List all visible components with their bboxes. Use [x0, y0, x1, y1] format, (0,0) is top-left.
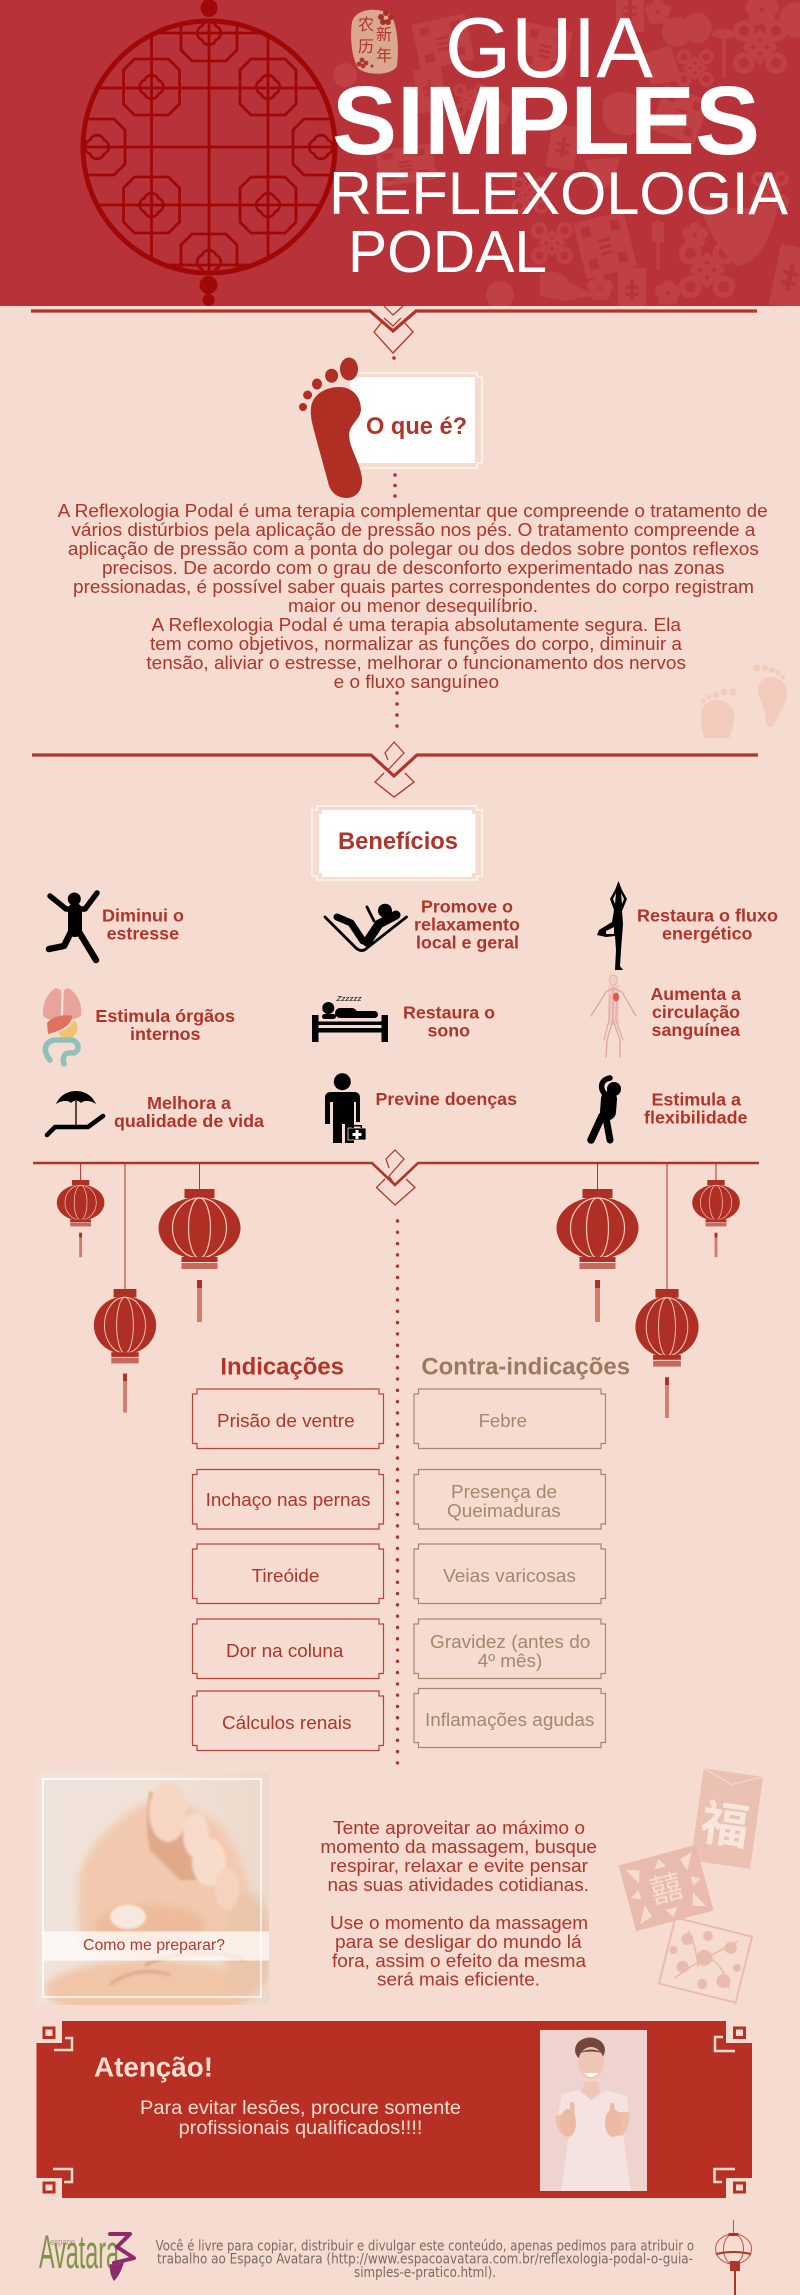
benefit: qualidade de vida: Melhora a — [147, 1093, 231, 1113]
corner ornaments — [44, 2028, 744, 2192]
heading: Indicações: Indicações — [220, 1354, 344, 1381]
list: contraindications — [414, 1389, 606, 1748]
benefit: órgãos internos: internos — [130, 1024, 201, 1044]
list: indications: Cálculos renais — [222, 1712, 352, 1733]
benefit: previne doenças: Previne doenças — [376, 1089, 517, 1109]
dots — [393, 473, 397, 498]
text block: how to prepare: para se desligar do mundo lá — [335, 1931, 582, 1952]
benefit: diminui o estresse: Diminui o — [102, 906, 184, 926]
logo: Espaço Avatara: Avatara — [39, 2225, 119, 2278]
icon: lunar new year stamp — [351, 10, 398, 74]
text block: how to prepare: fora, assim o efeito da mesma — [332, 1950, 587, 1971]
benefit: diminui o estresse — [49, 892, 184, 960]
list: contraindications: Febre — [479, 1410, 527, 1431]
list: indications: Dor na coluna — [226, 1640, 344, 1661]
logo: Espaço Avatara — [39, 2225, 134, 2281]
icon: internal organs — [43, 988, 81, 1064]
icon: red envelope and paper cuts: 囍 — [646, 1867, 686, 1910]
text block: what it is: pressionadas, é possível saber quais partes correspondentes do corpo registram — [73, 576, 754, 597]
panel: Benefícios heading — [312, 806, 482, 880]
icon: ornamental round window lattice — [69, 0, 350, 306]
title: SIMPLES — [332, 66, 760, 175]
list: contraindications: 4º mês) — [478, 1650, 542, 1671]
text block: how to prepare: nas suas atividades cotidianas. — [328, 1874, 589, 1895]
caption strip — [43, 1931, 269, 1961]
benefit: circulação: Aumenta a — [650, 984, 741, 1004]
list: indications: Inchaço nas pernas — [206, 1489, 370, 1510]
benefit: relaxamento: Promove o — [421, 897, 513, 917]
text block: how to prepare: Tente aproveitar ao máximo o — [333, 1817, 585, 1838]
icon: faded footprints — [701, 664, 787, 745]
footer text: trabalho ao Espaço Avatara (http://www.espacoavatara.com.br/reflexologia-podal-o-guia- — [157, 2252, 693, 2268]
benefit: circulação: circulação — [652, 1002, 740, 1022]
text block: how to prepare: Use o momento da massagem — [330, 1912, 588, 1933]
text block: what it is: tem como objetivos, normalizar as funções do corpo, diminuir a — [150, 633, 683, 654]
lanterns left — [57, 1163, 240, 1413]
benefit: flexibilidade: Estimula a — [652, 1090, 741, 1110]
benefit: órgãos internos — [43, 988, 235, 1064]
divider 2 — [32, 742, 758, 797]
panel: O que é — [350, 373, 482, 468]
benefit: sono: sono — [428, 1021, 470, 1041]
benefit: circulação: sanguínea — [652, 1020, 740, 1040]
title: GUIA — [445, 1, 653, 96]
benefit: flexibilidade: flexibilidade — [644, 1108, 748, 1128]
panel: attention — [36, 2021, 752, 2198]
warning text: profissionais qualificados!!!! — [179, 2118, 422, 2139]
header banner — [0, 0, 800, 312]
text block: what it is: maior ou menor desequilíbrio. — [288, 595, 538, 616]
heading: Atenção: Atenção! — [94, 2052, 213, 2083]
list: indications — [192, 1389, 384, 1750]
icon: person with first aid kit — [325, 1073, 366, 1143]
list: indications: Prisão de ventre — [217, 1410, 355, 1431]
text block: what it is: e o fluxo sanguíneo — [334, 671, 499, 692]
text block: what it is: A Reflexologia Podal é uma terapia complementar que compreende o tratamento de — [58, 500, 768, 521]
text block: what it is: aplicação de pressão com a ponta do polegar ou dos dedos sobre pontos reflexos — [68, 538, 759, 559]
icon: footer lantern — [716, 2220, 752, 2295]
icon: beach chair and umbrella — [47, 1091, 103, 1135]
icon: stretching person — [591, 1078, 621, 1140]
text block: what it is: A Reflexologia Podal é uma terapia absolutamente segura. Ela — [152, 614, 682, 635]
dots — [395, 691, 399, 728]
benefit: fluxo energético: energético — [662, 924, 753, 944]
benefit: sono — [312, 996, 495, 1042]
benefit: qualidade de vida: qualidade de vida — [114, 1111, 264, 1131]
title — [329, 1, 788, 285]
footer text: Você é livre para copiar, distribuir e divulgar este conteúdo, apenas pedimos para atribuir o — [156, 2238, 694, 2254]
benefit: relaxamento: local e geral — [416, 933, 519, 953]
title: REFLEXOLOGIA — [329, 160, 788, 227]
title: PODAL — [348, 219, 547, 285]
text block: what it is: tensão, aliviar o estresse, melhorar o funcionamento dos nervos — [146, 652, 686, 673]
text block: what it is: precisos. De acordo com o grau de desconforto experimentado nas zonas — [102, 557, 724, 578]
photo: foot massage: Como me preparar? — [83, 1937, 225, 1954]
dot — [392, 356, 396, 360]
benefit: relaxamento: relaxamento — [414, 915, 520, 935]
benefit: fluxo energético: Restaura o fluxo — [637, 906, 778, 926]
benefit: previne doenças — [325, 1073, 517, 1143]
list: contraindications: Gravidez (antes do — [430, 1631, 590, 1652]
icon: sleeping person on bed — [312, 996, 388, 1042]
list: contraindications: Inflamações agudas — [425, 1709, 594, 1730]
dotted center line — [396, 1221, 399, 1765]
benefit: fluxo energético — [597, 881, 778, 970]
icon: reclining person — [325, 904, 406, 950]
lanterns right — [556, 1163, 740, 1418]
benefit: qualidade de vida — [47, 1091, 264, 1135]
benefit: sono: Restaura o — [403, 1003, 495, 1023]
text block: how to prepare: momento da massagem, busque — [320, 1836, 597, 1857]
icon: lunar new year stamp: 年 — [376, 47, 392, 65]
icon: jumping person — [49, 892, 97, 960]
divider 1 — [31, 306, 757, 353]
footer text: simples-e-pratico.html). — [354, 2265, 496, 2281]
benefit: relaxamento — [325, 897, 520, 953]
divider 3 — [33, 1150, 759, 1205]
list: contraindications: Presença de — [451, 1481, 557, 1502]
icon: red envelope and paper cuts — [619, 1768, 763, 2003]
icon: lunar new year stamp: 新 — [376, 26, 392, 44]
icon: circulatory system — [591, 975, 636, 1057]
benefit: órgãos internos: Estimula órgãos — [95, 1006, 235, 1026]
icon: sleeping person on bed: Zzzzzz — [335, 996, 362, 1003]
photo: foot massage — [37, 1773, 272, 2020]
icon: lunar new year stamp: 农 — [358, 16, 374, 34]
text block: what it is — [58, 500, 768, 692]
text block: what it is: vários distúrbios pela aplicação de pressão nos pés. O tratamento compreende a — [71, 519, 756, 540]
benefit: circulação — [591, 975, 741, 1057]
photo: therapist thumbs up — [540, 2030, 647, 2191]
list: contraindications: Queimaduras — [447, 1500, 561, 1521]
benefit: flexibilidade — [591, 1078, 748, 1140]
logo: Espaço Avatara: espaço — [50, 2237, 75, 2247]
warning text — [140, 2098, 461, 2139]
decorative new-year pattern — [333, 0, 800, 312]
heading: O que é: O que é? — [366, 414, 467, 440]
heading: Contra-indicações: Contra-indicações — [421, 1354, 630, 1381]
icon: lunar new year stamp: 历 — [358, 39, 374, 56]
text block: how to prepare: será mais eficiente. — [377, 1969, 540, 1990]
icon: footprint — [299, 358, 362, 498]
list: contraindications: Veias varicosas — [443, 1565, 576, 1586]
benefit: diminui o estresse: estresse — [107, 924, 179, 944]
panel: Benefícios heading: Benefícios — [338, 829, 458, 855]
text block: how to prepare: respirar, relaxar e evite pensar — [330, 1855, 588, 1876]
icon: red envelope and paper cuts: 福 — [697, 1797, 752, 1856]
icon: yoga pose — [597, 881, 627, 970]
list: indications: Tireóide — [252, 1565, 319, 1586]
footer text — [156, 2238, 694, 2281]
text block: how to prepare — [320, 1817, 597, 1990]
warning text: Para evitar lesões, procure somente — [140, 2098, 461, 2119]
